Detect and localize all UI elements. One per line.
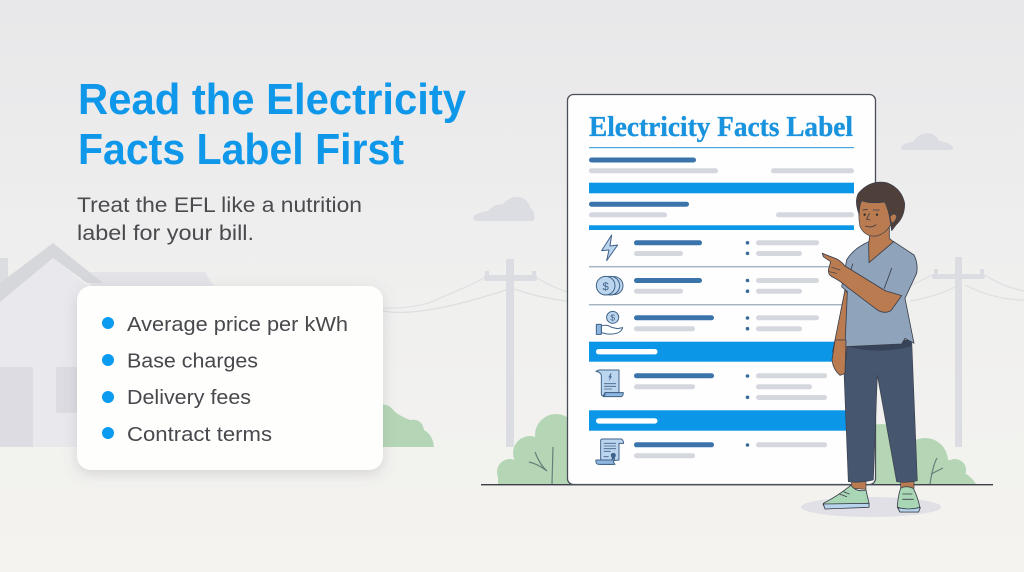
shirt [842,241,917,347]
row 5 bars [634,442,827,458]
person pointing at the label [822,182,920,512]
list item: base charges: Base charges [127,350,258,372]
row 3 bars [634,315,819,331]
icon: hand holding coin: $ [610,313,615,323]
subtitle: label for your bill. [77,221,254,245]
left bush [497,414,577,485]
subtitle [77,193,362,245]
icon: hand holding coin [596,311,623,334]
icon: lightning bolt [602,235,618,261]
sleeve crease [848,264,892,288]
panel: electricity facts label document [568,94,876,484]
icon: bill scroll with bolt [596,370,623,397]
list item: delivery fees: Delivery fees [127,386,251,409]
cloud right [901,133,953,150]
icon: coins [596,276,623,295]
list item: contract terms: Contract terms [127,423,272,446]
subtitle: Treat the EFL like a nutrition [77,193,362,217]
right utility pole and wires [910,257,1024,447]
title: Read the Electricity [78,75,467,124]
neck [869,225,893,263]
icon: contract scroll with seal [596,439,624,464]
row 4 bars [634,373,827,400]
background house [0,243,225,447]
legs and shoes [823,340,920,512]
blue section band 1 [589,342,854,362]
eyes and mouth [863,209,879,227]
small bush behind list card [370,404,434,447]
row 2 bars [634,278,819,294]
document title: Electricity Facts Label [589,112,853,143]
figure shadow [801,497,941,517]
cloud left [473,197,534,221]
pointing arm [822,253,902,312]
section: header bars [589,147,854,230]
list item: average price: Average price per kWh [127,313,348,336]
torso, head and arms [822,182,917,360]
blue section band 2 [589,410,854,431]
title: Facts Label First [78,125,404,174]
panel: checklist card [77,286,383,470]
face [859,198,894,236]
title [78,75,467,174]
icon: coins: $ [603,281,610,293]
left utility pole and wires [383,259,567,447]
hair [856,182,905,231]
right bush [860,424,976,484]
ground line [481,484,993,485]
hanging hand [832,340,846,375]
hanging arm [833,290,851,360]
row 1 bars [634,240,819,256]
ear [890,214,897,223]
